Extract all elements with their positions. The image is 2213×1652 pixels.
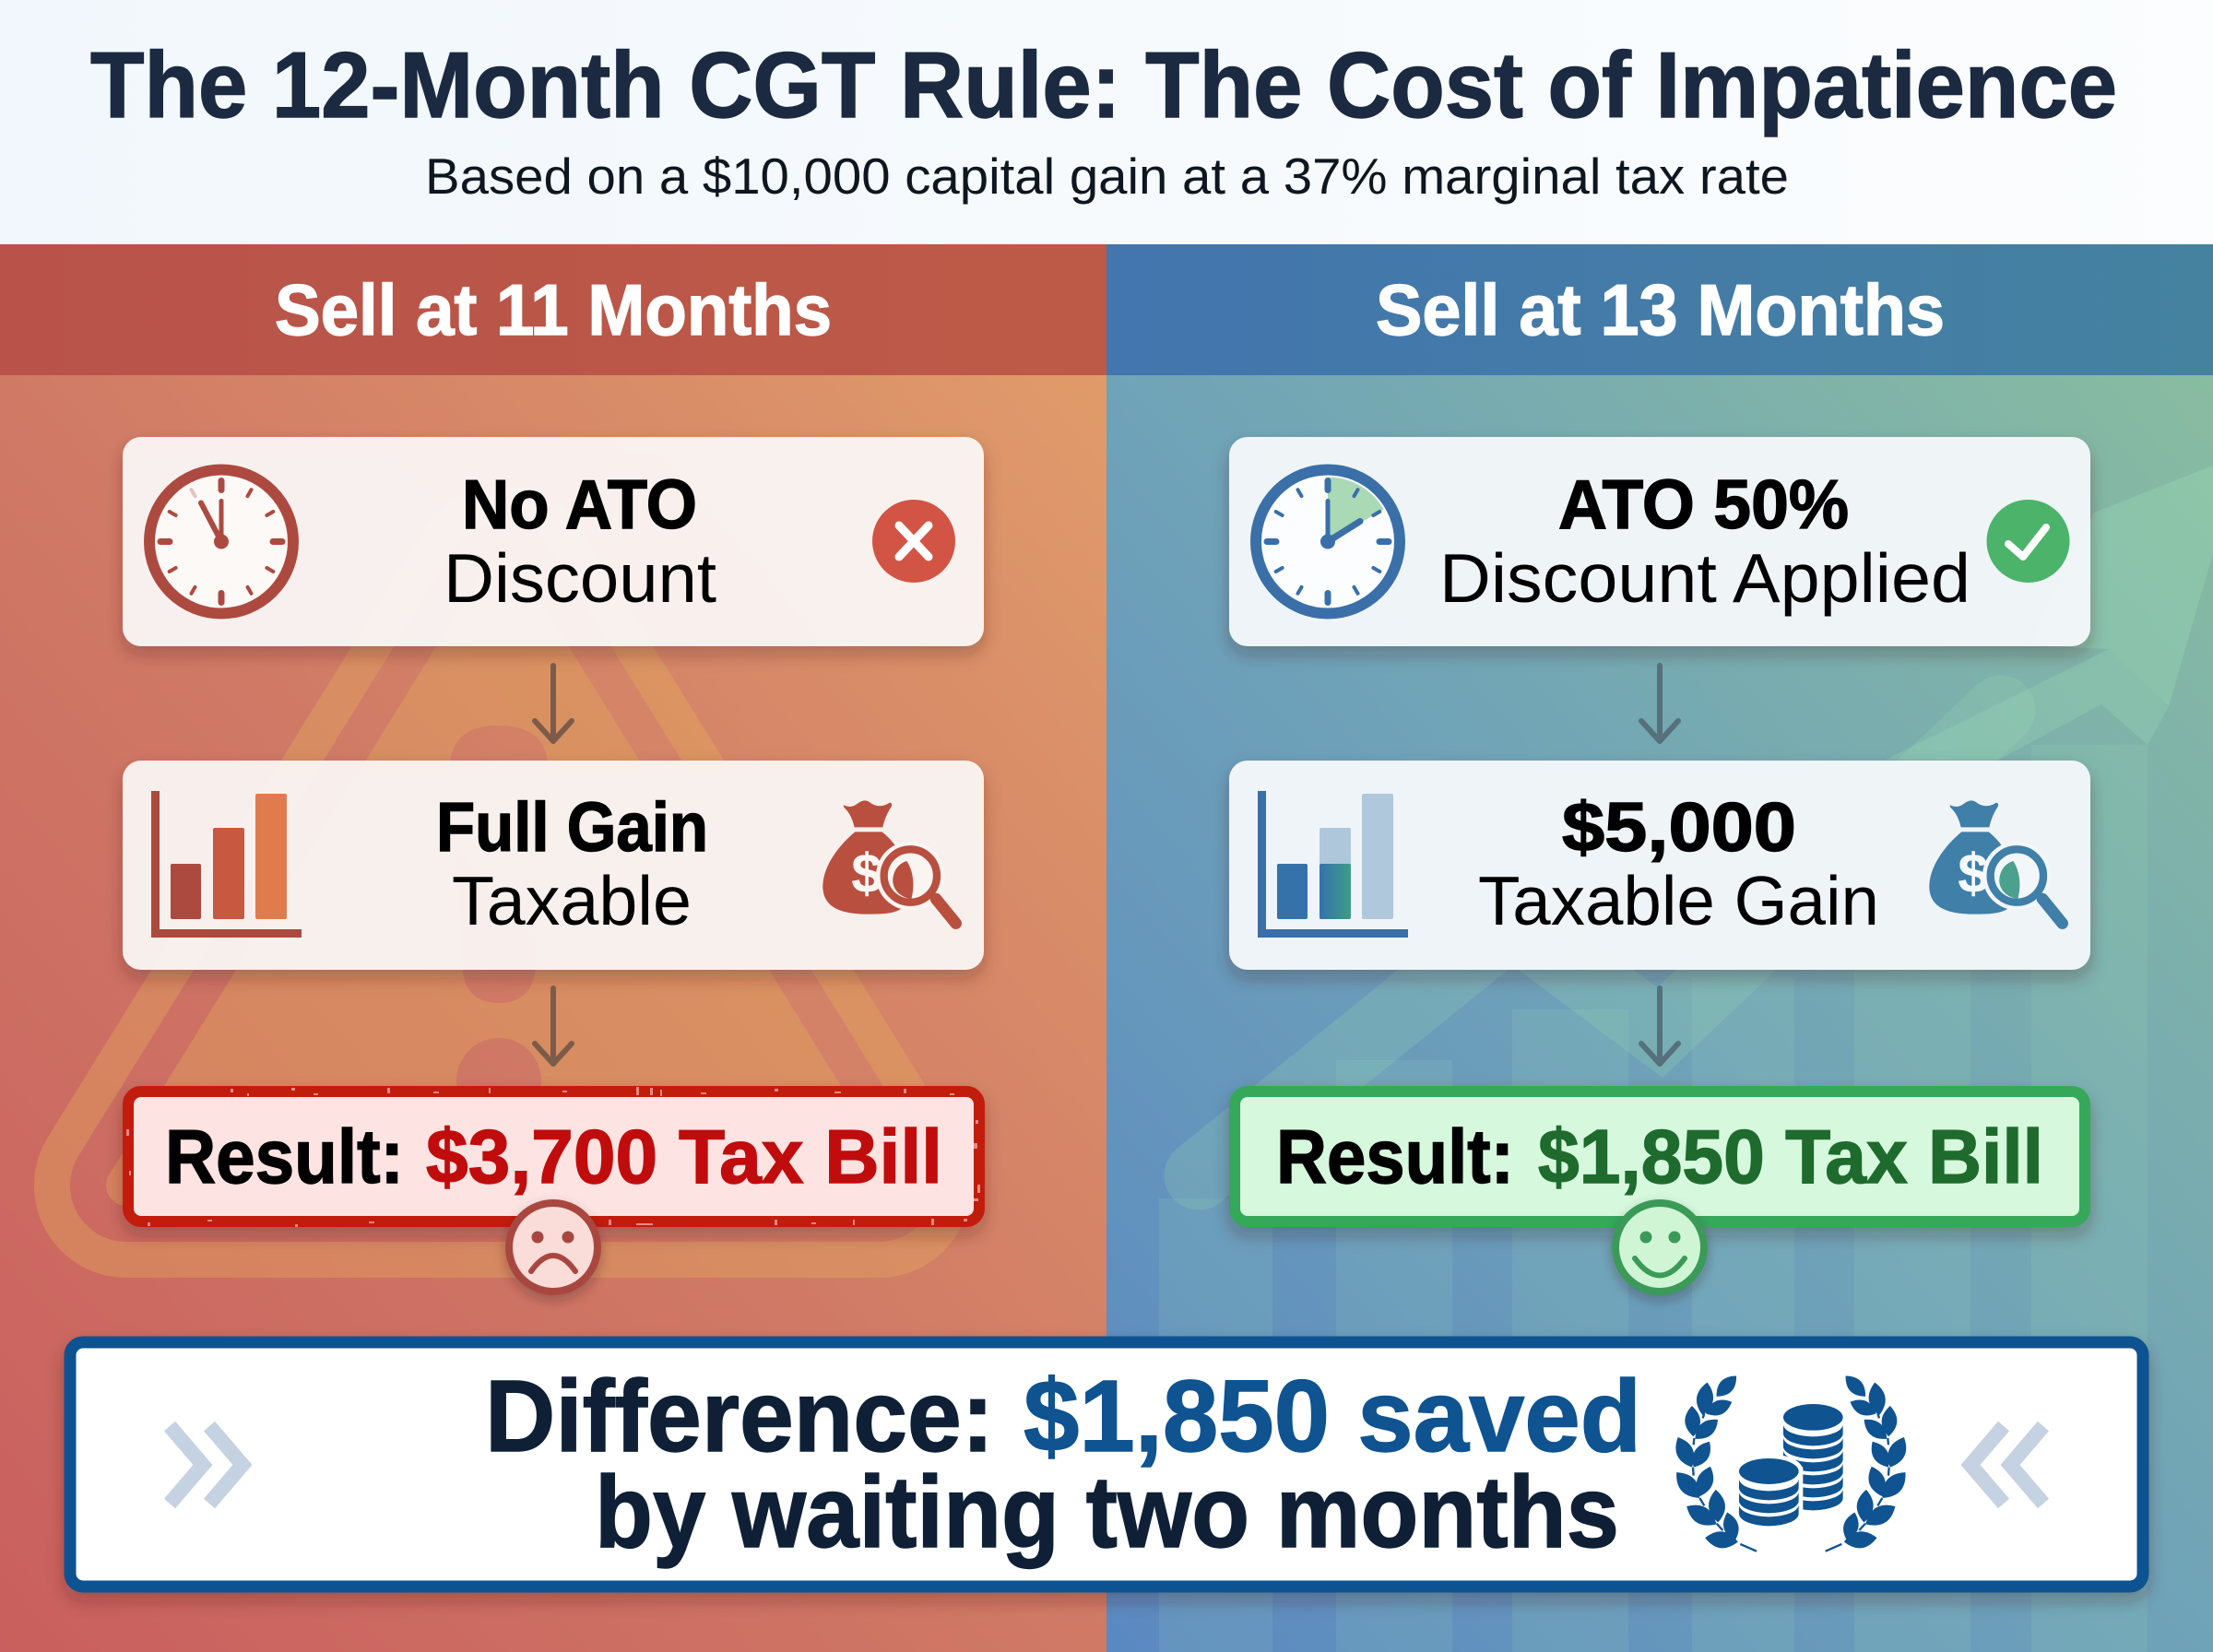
card text: full gain taxable: Taxable xyxy=(452,862,692,939)
icon: money bag with magnifier left: $ xyxy=(851,842,882,903)
tall coin stack xyxy=(1783,1404,1843,1510)
card text: 5,000 taxable gain: $5,000 xyxy=(1562,788,1796,866)
background rising bars and arrow xyxy=(1159,466,2213,1652)
card text: ATO 50% discount applied: ATO 50% xyxy=(1558,466,1849,543)
card text: 5,000 taxable gain: Taxable Gain xyxy=(1478,862,1879,939)
banner text line 1: Difference: xyxy=(485,1360,994,1473)
icon: happy face xyxy=(1615,1203,1704,1292)
arrow 2 left xyxy=(535,988,572,1064)
icon: money bag with magnifier right: $ xyxy=(1958,842,1988,903)
card: no ATO discount xyxy=(123,437,984,646)
card: ATO 50% discount applied xyxy=(1229,437,2090,646)
panel background right xyxy=(1106,375,2213,1652)
header background xyxy=(0,0,2213,244)
right laurel branch xyxy=(1826,1371,1911,1552)
card text: no ATO discount: Discount xyxy=(444,539,716,617)
card text: no ATO discount: No ATO xyxy=(462,466,697,543)
icon: chevrons right xyxy=(1970,1426,2043,1504)
banner text line 1 xyxy=(485,1360,1641,1473)
arrow 2 right xyxy=(1641,988,1678,1064)
icon: clock at 11 months xyxy=(149,470,293,614)
card: full gain taxable xyxy=(123,761,984,970)
banner text line 2: by waiting two months xyxy=(595,1456,1619,1569)
icon: green check xyxy=(1986,500,2069,583)
card text: no ATO discount xyxy=(444,466,716,617)
result text right: Result: xyxy=(1276,1114,1514,1199)
result text right xyxy=(1276,1114,2043,1199)
icon: laurel with coin stacks xyxy=(1670,1371,1911,1552)
card text: ATO 50% discount applied: Discount Applied xyxy=(1439,539,1970,617)
short coin stack xyxy=(1739,1458,1799,1526)
result text left: $3,700 Tax Bill xyxy=(426,1114,942,1199)
title: The 12-Month CGT Rule: The Cost of Impatience xyxy=(90,34,2117,137)
panel heading band left xyxy=(0,244,1106,375)
left laurel branch xyxy=(1670,1371,1757,1552)
icon: red cross xyxy=(872,500,955,583)
card text: ATO 50% discount applied xyxy=(1439,466,1970,617)
card text: full gain taxable: Full Gain xyxy=(436,788,708,866)
result text left xyxy=(165,1114,942,1199)
banner text line 1: $1,850 saved xyxy=(1024,1360,1641,1473)
arrow 1 right xyxy=(1641,666,1678,741)
distressed border texture xyxy=(126,1087,980,1227)
icon: chevrons left xyxy=(170,1426,243,1504)
heading: sell at 11 months: Sell at 11 Months xyxy=(275,269,832,350)
panel heading band right xyxy=(1106,244,2213,375)
card text: full gain taxable xyxy=(436,788,708,939)
result text left: Result: xyxy=(165,1114,404,1199)
result box: 3,700 tax bill xyxy=(126,1087,980,1227)
icon: sad face xyxy=(509,1203,598,1292)
icon: money bag with magnifier left xyxy=(822,800,956,924)
icon: bar chart left xyxy=(151,791,302,938)
result text right: $1,850 Tax Bill xyxy=(1538,1114,2043,1199)
banner: difference xyxy=(70,1342,2143,1587)
card: 5,000 taxable gain xyxy=(1229,761,2090,970)
background warning triangle xyxy=(34,646,961,1278)
icon: money bag with magnifier right xyxy=(1929,800,2063,924)
icon: clock at 13 months xyxy=(1256,470,1400,614)
panel: sell at 13 months xyxy=(1106,244,2213,1652)
panel background left xyxy=(0,375,1106,1652)
subtitle: Based on a $10,000 capital gain at a 37% marginal tax rate xyxy=(425,148,1789,205)
card text: 5,000 taxable gain xyxy=(1478,788,1879,939)
icon: bar chart right xyxy=(1258,791,1408,938)
panel: sell at 11 months xyxy=(0,244,1106,1652)
arrow 1 left xyxy=(535,666,572,741)
heading: sell at 13 months: Sell at 13 Months xyxy=(1376,269,1945,350)
result box: 1,850 tax bill xyxy=(1235,1092,2085,1221)
